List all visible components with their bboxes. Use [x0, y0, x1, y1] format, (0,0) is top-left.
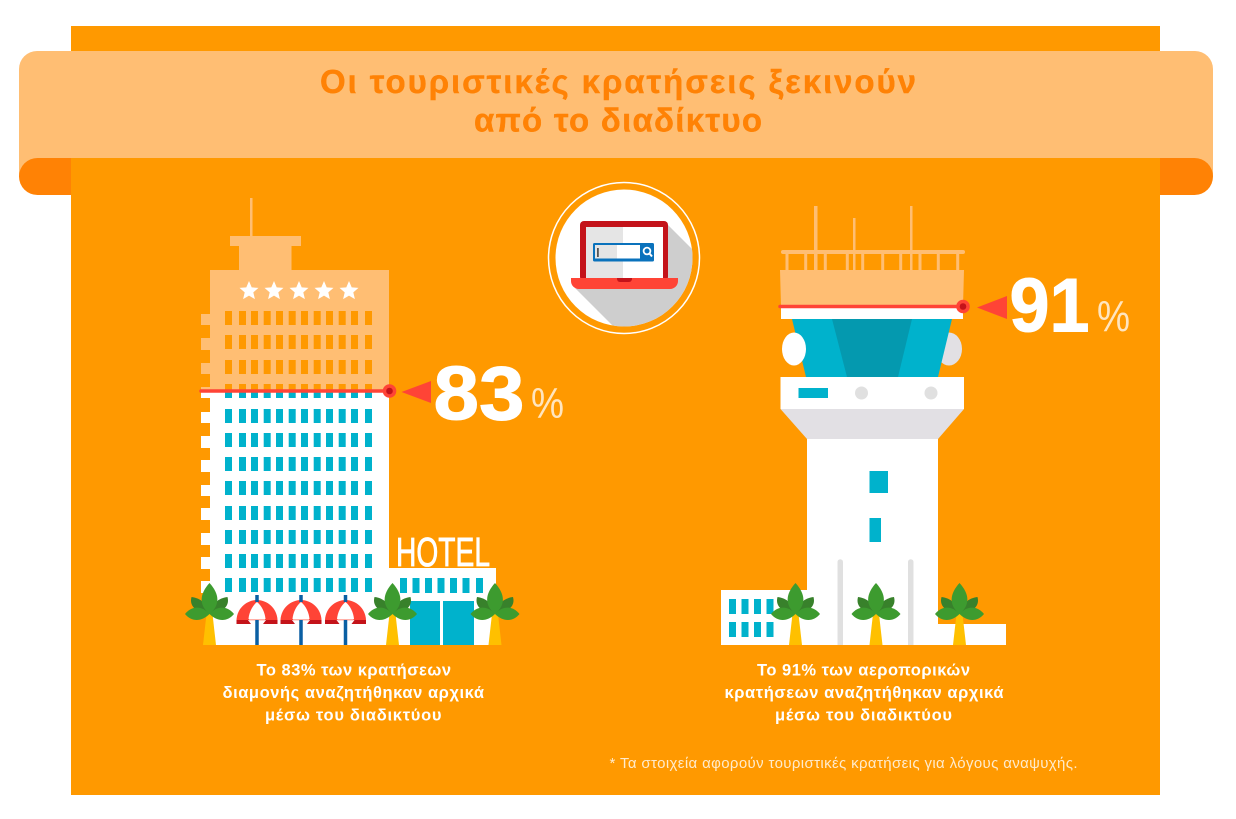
caption: flights: μέσω του διαδικτύου [775, 706, 952, 724]
tower glass cab [792, 319, 952, 377]
tower shaft [807, 439, 938, 645]
number: 83 percent: % [531, 380, 564, 428]
low building right [938, 624, 1006, 645]
tower cab roof band [781, 308, 963, 319]
title: από το διαδίκτυο [474, 102, 762, 138]
palm trees [771, 583, 984, 645]
tower deck [780, 377, 964, 439]
icon: laptop with search bar [548, 182, 700, 334]
panel: airport control tower [721, 206, 1006, 645]
arrow: tower [977, 296, 1007, 319]
caption: hotel [222, 662, 484, 724]
caption: hotel: μέσω του διαδικτύου [265, 706, 442, 724]
umbrellas [236, 595, 366, 645]
hotel tower windows [225, 384, 372, 592]
hotel lobby building [389, 568, 496, 645]
hotel tower filled part [201, 270, 389, 398]
title: Οι τουριστικές κρατήσεις ξεκινούν [320, 63, 916, 100]
hotel sign: HOTEL [396, 529, 490, 575]
hotel roof and antenna [230, 198, 301, 270]
caption: hotel: Το 83% των κρατήσεων [256, 662, 451, 680]
caption: flights: Το 91% των αεροπορικών [757, 662, 970, 680]
panel: hotel [185, 198, 520, 645]
tower antennas and railing [780, 206, 965, 306]
number: 83 percent [434, 352, 564, 436]
tower left light [782, 332, 806, 366]
footnote: * Τα στοιχεία αφορούν τουριστικές κρατήσεις για λόγους αναψυχής. [610, 755, 1078, 772]
caption: flights [724, 662, 1004, 724]
caption: flights: κρατήσεων αναζητήθηκαν αρχικά [724, 684, 1004, 702]
tower side lights [936, 332, 962, 366]
marker: tower 91 percent line [780, 300, 970, 313]
title banner [19, 51, 1213, 198]
marker: hotel 83 percent line [201, 384, 396, 398]
hotel tower white part [201, 391, 389, 645]
arrow: hotel [402, 381, 431, 403]
palm trees [185, 583, 520, 645]
five stars [240, 281, 358, 299]
terminal building left [721, 590, 807, 645]
number: 91 percent: 91 [1010, 264, 1090, 348]
number: 83 percent: 83 [434, 352, 524, 436]
number: 91 percent: % [1097, 292, 1130, 341]
caption: hotel: διαμονής αναζητήθηκαν αρχικά [222, 684, 484, 702]
title [320, 63, 916, 138]
